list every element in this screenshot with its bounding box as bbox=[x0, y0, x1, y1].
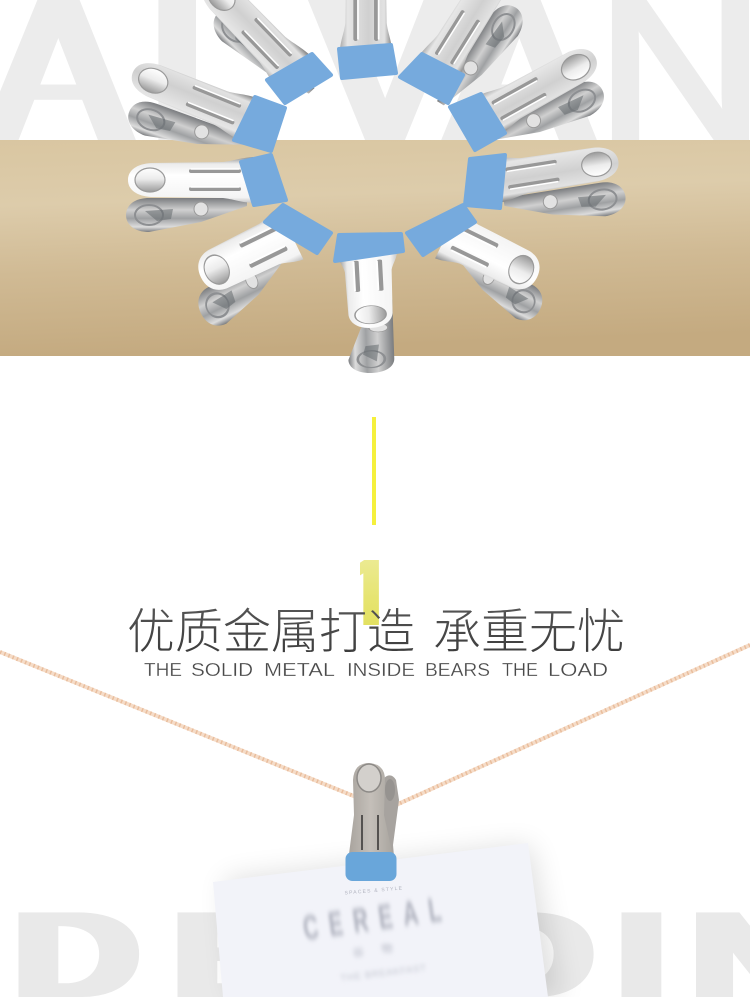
small clip holding card bbox=[346, 763, 399, 881]
subheading: English: LOAD bbox=[548, 660, 608, 680]
clip: right bbox=[465, 138, 628, 232]
heading: Chinese title: 优质金属打造 bbox=[127, 606, 415, 659]
clip: left bbox=[126, 155, 286, 232]
subheading: English: METAL bbox=[264, 660, 335, 680]
rope bbox=[0, 645, 750, 805]
heading: Chinese title: 承重无忧 bbox=[433, 606, 625, 659]
background word: bedding fragments bbox=[18, 912, 750, 997]
clip: lower left bbox=[188, 205, 331, 332]
background word: AIVAN bbox=[0, 0, 749, 140]
product photo: ring of ten clips bbox=[123, 0, 628, 374]
card blurred title: CEREAL bbox=[300, 888, 454, 947]
clip: lower right bbox=[407, 205, 549, 326]
tan background band bbox=[0, 140, 750, 356]
clip: upper right bbox=[450, 36, 610, 163]
yellow vertical line bbox=[372, 417, 376, 525]
clip: upper left bbox=[123, 51, 285, 169]
subheading: English: INSIDE bbox=[347, 660, 415, 680]
clip: top right bbox=[400, 0, 530, 119]
clip: top centre bbox=[339, 0, 396, 78]
large numeral 1: 1 bbox=[337, 536, 400, 662]
card blurred subtitle: 谷物 bbox=[352, 938, 411, 961]
clip: bottom centre bbox=[335, 234, 403, 374]
card blurred line: THE BREAKFAST bbox=[340, 963, 427, 983]
card shadow bbox=[225, 845, 560, 997]
clip: top left bbox=[190, 0, 331, 112]
subheading: English: THE bbox=[144, 660, 182, 680]
subheading: English: BEARS bbox=[425, 660, 490, 680]
subheading: English: SOLID bbox=[191, 660, 253, 680]
card tiny caption: SPACES & STYLE bbox=[344, 885, 403, 897]
subheading: English: THE bbox=[502, 660, 538, 680]
hanging card bbox=[213, 843, 548, 997]
